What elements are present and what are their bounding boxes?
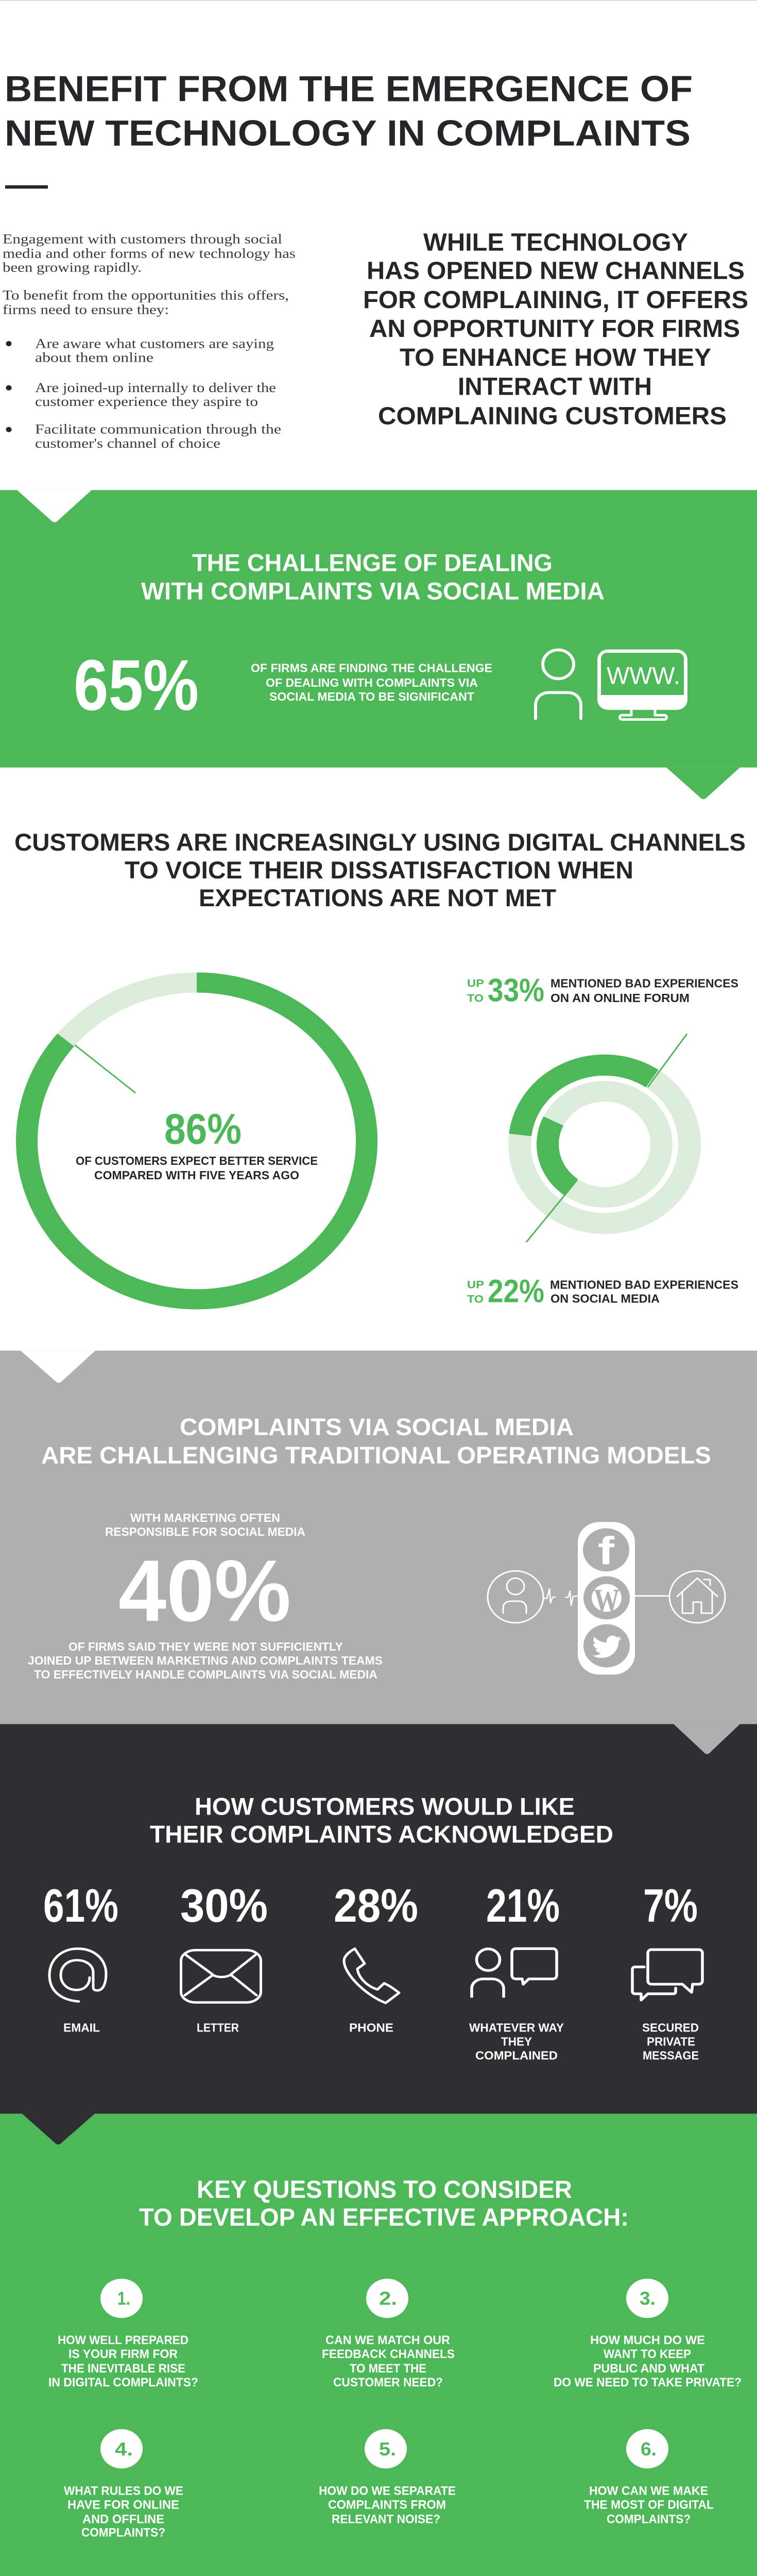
question 5: RELEVANT NOISE? — [332, 2512, 440, 2526]
icon: customer in circle — [488, 1571, 543, 1623]
column: letter — [180, 1879, 268, 2035]
panel: challenge of social media — [0, 490, 757, 799]
stat intro: RESPONSIBLE FOR SOCIAL MEDIA — [105, 1526, 305, 1539]
question 1: HOW WELL PREPARED — [58, 2333, 188, 2347]
question 4: COMPLAINTS? — [81, 2526, 165, 2539]
heading: THE CHALLENGE OF DEALING — [192, 549, 553, 577]
stat: up to 22%: TO — [467, 1293, 484, 1305]
stat description: OF FIRMS ARE FINDING THE CHALLENGE — [251, 662, 492, 675]
question 5: 5. — [379, 2438, 396, 2460]
key message: AN OPPORTUNITY FOR FIRMS — [369, 315, 740, 343]
icon: social media pill: W — [594, 1583, 620, 1619]
donut chart: 86%: OF CUSTOMERS EXPECT BETTER SERVICE — [76, 1155, 318, 1168]
connector: heartbeat — [544, 1589, 578, 1605]
question 2: FEEDBACK CHANNELS — [322, 2347, 455, 2361]
column: secured private message: PRIVATE — [647, 2035, 695, 2048]
stat: up to 22%: UP — [467, 1278, 484, 1291]
question 4: 4. — [115, 2438, 133, 2460]
stat: up to 22% — [467, 1273, 738, 1309]
heading: HOW CUSTOMERS WOULD LIKE — [195, 1793, 575, 1820]
column: letter: LETTER — [197, 2021, 239, 2035]
column: whatever way: THEY — [501, 2035, 532, 2048]
key message: INTERACT WITH — [458, 372, 652, 400]
stat: up to 33%: UP — [467, 977, 484, 989]
bullet list: customer's channel of choice — [35, 436, 220, 451]
question 1: IN DIGITAL COMPLAINTS? — [48, 2376, 198, 2389]
question 1: IS YOUR FIRM FOR — [68, 2347, 178, 2361]
question 3: HOW MUCH DO WE — [590, 2333, 705, 2347]
heading — [41, 1414, 711, 1469]
column: letter: 30% — [180, 1879, 268, 1932]
intro text block: been growing rapidly. — [3, 260, 142, 275]
heading: COMPLAINTS VIA SOCIAL MEDIA — [180, 1414, 574, 1440]
icon: www monitor: WWW. — [607, 662, 680, 689]
question 2: CUSTOMER NEED? — [333, 2376, 443, 2389]
column: whatever way: 21% — [486, 1879, 560, 1932]
column: email: 61% — [43, 1879, 118, 1932]
panel: how customers want acknowledgement — [0, 1724, 757, 2114]
panel: key questions — [0, 2113, 757, 2576]
heading — [150, 1793, 613, 1848]
title: BENEFIT FROM THE EMERGENCE OF — [5, 69, 693, 109]
question 6 — [584, 2429, 714, 2526]
stat description — [251, 662, 492, 704]
heading: THEIR COMPLAINTS ACKNOWLEDGED — [150, 1821, 613, 1848]
bullet list: Facilitate communication through the — [35, 421, 281, 436]
intro text block: Engagement with customers through social — [3, 231, 282, 246]
donut chart: 86%: 86% — [164, 1105, 242, 1153]
column: secured private message: SECURED — [642, 2021, 699, 2035]
stat: up to 33% — [467, 972, 738, 1008]
stat: up to 33%: MENTIONED BAD EXPERIENCES — [550, 977, 738, 990]
column: secured private message — [632, 1879, 702, 2062]
column: email — [43, 1879, 118, 2035]
question 4: WHAT RULES DO WE — [64, 2484, 183, 2498]
bullet list: customer experience they aspire to — [35, 394, 258, 409]
panel: traditional operating models — [0, 1351, 757, 1724]
icon: person — [536, 650, 581, 719]
heading: TO VOICE THEIR DISSATISFACTION WHEN — [125, 856, 633, 884]
key message: WHILE TECHNOLOGY — [423, 228, 688, 256]
heading: TO DEVELOP AN EFFECTIVE APPROACH: — [139, 2204, 629, 2231]
stat description: OF FIRMS SAID THEY WERE NOT SUFFICIENTLY — [68, 1640, 343, 1654]
intro text block: media and other forms of new technology has — [3, 246, 296, 261]
question 5: HOW DO WE SEPARATE — [319, 2484, 456, 2498]
panel: digital channels — [14, 828, 746, 1309]
icon: house in circle — [669, 1571, 725, 1623]
question 3: WANT TO KEEP — [604, 2347, 691, 2361]
stat description: SOCIAL MEDIA TO BE SIGNIFICANT — [269, 690, 474, 704]
column: secured private message: MESSAGE — [643, 2049, 699, 2062]
bullet list — [6, 336, 281, 451]
title dash — [5, 185, 48, 189]
bullet list: about them online — [35, 350, 153, 365]
panel: intro — [3, 69, 748, 451]
heading — [141, 549, 605, 605]
stat: up to 33%: TO — [467, 992, 484, 1004]
column: whatever way: WHATEVER WAY — [469, 2021, 564, 2035]
column: phone — [334, 1879, 418, 2035]
concentric donut chart: 33% and 22% — [520, 1034, 690, 1242]
stat description: TO EFFECTIVELY HANDLE COMPLAINTS VIA SOCIAL MEDIA — [34, 1668, 377, 1682]
title — [5, 69, 693, 154]
column: secured private message: 7% — [643, 1879, 698, 1932]
column: whatever way: COMPLAINED — [475, 2049, 558, 2062]
question 6: COMPLAINTS? — [607, 2512, 691, 2526]
stat description: OF DEALING WITH COMPLAINTS VIA — [266, 676, 478, 690]
question 2: CAN WE MATCH OUR — [325, 2333, 450, 2347]
question 3: PUBLIC AND WHAT — [593, 2362, 705, 2376]
heading: WITH COMPLAINTS VIA SOCIAL MEDIA — [141, 578, 605, 605]
title: NEW TECHNOLOGY IN COMPLAINTS — [5, 113, 691, 154]
donut chart: 86%: COMPARED WITH FIVE YEARS AGO — [94, 1169, 299, 1182]
intro text block — [3, 231, 296, 317]
icon: www monitor — [597, 649, 687, 719]
column: email: EMAIL — [63, 2021, 100, 2035]
question 1: THE INEVITABLE RISE — [61, 2362, 185, 2376]
question 6: THE MOST OF DIGITAL — [584, 2498, 714, 2512]
heading: EXPECTATIONS ARE NOT MET — [199, 884, 556, 912]
column: phone: PHONE — [349, 2021, 393, 2035]
stat intro — [105, 1512, 305, 1539]
icon: social media pill: f — [598, 1529, 615, 1573]
question 4: AND OFFLINE — [82, 2512, 164, 2526]
stat description: JOINED UP BETWEEN MARKETING AND COMPLAINTS TEAMS — [28, 1654, 383, 1668]
question 1: 1. — [117, 2288, 130, 2309]
bullet list: Are joined-up internally to deliver the — [35, 380, 276, 395]
question 4: HAVE FOR ONLINE — [67, 2498, 179, 2512]
heading: ARE CHALLENGING TRADITIONAL OPERATING MODELS — [41, 1442, 711, 1469]
stat description — [28, 1640, 383, 1682]
key message — [363, 228, 748, 430]
question 2: TO MEET THE — [350, 2362, 426, 2376]
heading: KEY QUESTIONS TO CONSIDER — [197, 2176, 572, 2203]
stat: up to 33%: 33% — [488, 972, 544, 1008]
question 6: HOW CAN WE MAKE — [589, 2484, 708, 2498]
icon: social media pill — [578, 1522, 635, 1674]
question 3: 3. — [640, 2288, 656, 2309]
stat: 65%: 65% — [74, 645, 199, 725]
stat: up to 22%: 22% — [488, 1273, 544, 1309]
question 6: 6. — [641, 2438, 657, 2460]
stat: up to 22%: ON SOCIAL MEDIA — [550, 1292, 660, 1306]
question 2 — [322, 2279, 455, 2389]
question 5: COMPLAINTS FROM — [328, 2498, 446, 2512]
intro text block: To benefit from the opportunities this offers, — [3, 287, 289, 302]
stat intro: WITH MARKETING OFTEN — [130, 1512, 280, 1525]
stat: 40%: 40% — [118, 1543, 291, 1640]
connector line — [635, 1595, 669, 1597]
key message: TO ENHANCE HOW THEY — [400, 344, 711, 371]
key message: COMPLAINING CUSTOMERS — [378, 402, 727, 430]
question 3 — [554, 2279, 742, 2389]
stat: up to 33%: ON AN ONLINE FORUM — [550, 992, 690, 1005]
heading — [14, 828, 746, 912]
question 5 — [319, 2429, 456, 2526]
bullet list: Are aware what customers are saying — [35, 336, 274, 351]
intro text block: firms need to ensure they: — [3, 302, 169, 317]
donut chart: 86% — [27, 982, 367, 1299]
question 2: 2. — [379, 2288, 397, 2309]
heading — [139, 2176, 629, 2231]
column: whatever way — [469, 1879, 564, 2062]
question 4 — [64, 2429, 183, 2539]
question 1 — [48, 2279, 198, 2389]
stat: up to 22%: MENTIONED BAD EXPERIENCES — [550, 1278, 738, 1292]
column: phone: 28% — [334, 1879, 418, 1932]
